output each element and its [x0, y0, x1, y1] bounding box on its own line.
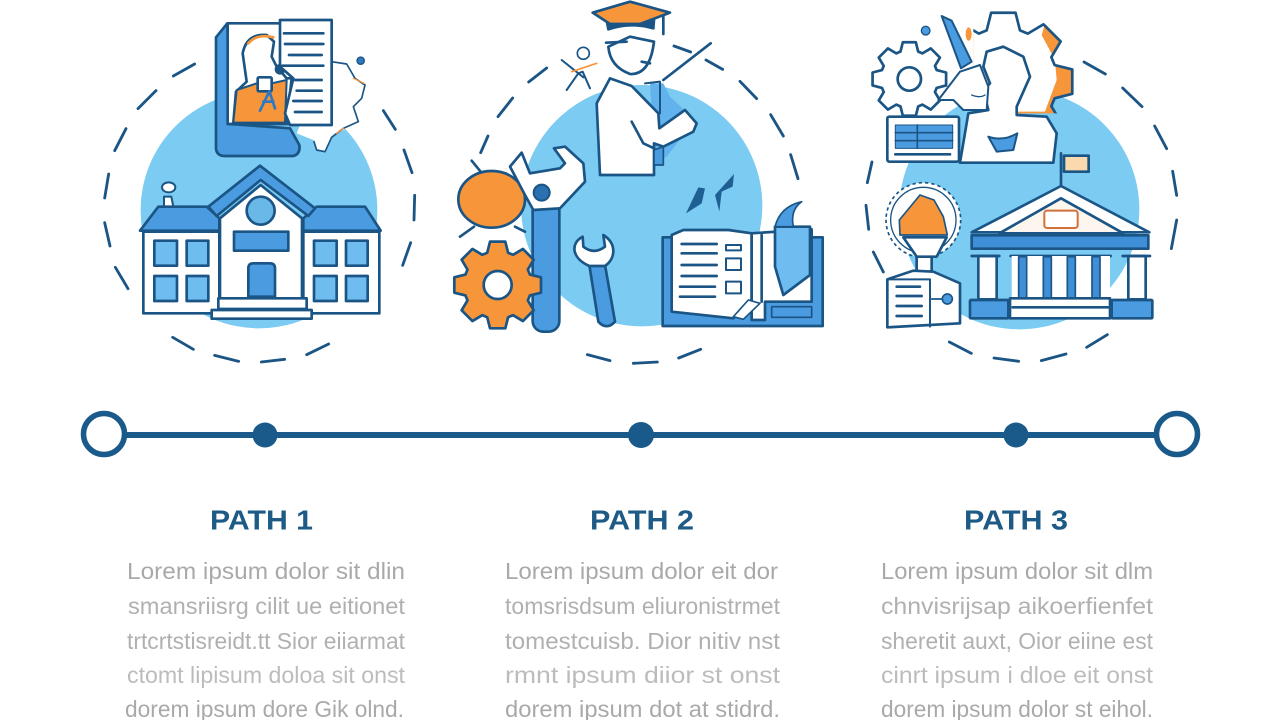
illustration: path 3 institution [866, 7, 1177, 361]
icon: orange bug with wrench [458, 161, 525, 237]
icon: orange gear [454, 242, 541, 328]
text block: path 1: smansriisrg cilit ue eitionet [128, 593, 406, 619]
illustration: path 1 school [105, 20, 415, 362]
text block: path 3: Lorem ipsum dolor sit dlm [881, 558, 1153, 584]
text block: path 2: tomsrisdsum eliuronistrmet [505, 593, 781, 619]
cap [607, 20, 654, 29]
dashed ring [481, 46, 798, 363]
timeline dot 1 [252, 422, 278, 448]
entablature [972, 235, 1148, 249]
icon: document [887, 117, 959, 162]
pediment [972, 186, 1149, 232]
background circle [141, 92, 377, 328]
heading: path 1: PATH 1 [210, 504, 313, 536]
chimney [164, 197, 174, 216]
text block: path 1: trtcrtstisreidt.tt Sior eiiarmat [127, 628, 406, 654]
icon: graduate teacher [593, 2, 711, 175]
text block: path 2: rmnt ipsum diior st onst [505, 662, 781, 688]
icon: large gear [973, 11, 1074, 114]
timeline dot 2 [628, 422, 654, 448]
icon: pencil [921, 16, 972, 68]
text block: path 1: ctomt lipisum doloa sit onst [127, 662, 406, 688]
face [608, 37, 654, 74]
pointer [663, 43, 711, 80]
icon: small wrench [574, 235, 615, 326]
flag [1057, 153, 1065, 185]
outer columns [978, 256, 997, 299]
icon: small gear [873, 42, 946, 116]
icon: large wrench [510, 147, 585, 332]
dashed ring [866, 62, 1177, 361]
icon: worker with helmet [886, 183, 961, 327]
icon: thinking person [938, 47, 1057, 163]
tie and book [650, 83, 695, 163]
text block: path 2: Lorem ipsum dolor eit dor [505, 558, 778, 584]
text block: path 3: sheretit auxt, Oior eiine est [881, 628, 1154, 654]
icon: school building [140, 166, 381, 319]
icon: book with reader [216, 20, 332, 156]
heading: path 2: PATH 2 [590, 504, 694, 536]
text block: path 3: cinrt ipsum i dloe eit onst [881, 662, 1154, 688]
heading: path 3: PATH 3 [964, 504, 1068, 536]
dashed ring [105, 64, 415, 362]
timeline end node [1156, 414, 1198, 454]
timeline dot 3 [1004, 422, 1028, 448]
wings [143, 232, 219, 313]
steps [1010, 298, 1110, 318]
text block: path 2 [505, 558, 781, 720]
steps [218, 298, 307, 309]
central block [220, 185, 302, 298]
text block: path 2: tomestcuisb. Dior nitiv nst [505, 628, 781, 654]
text block: path 1: Lorem ipsum dolor sit dlin [127, 558, 405, 584]
timeline [84, 414, 1198, 454]
wing roofs [140, 207, 219, 231]
windows [154, 241, 368, 301]
text block: path 3: chnvisrijsap aikoerfienfet [881, 593, 1154, 619]
background circle [521, 85, 762, 326]
text block: path 3 [881, 558, 1154, 720]
reader figure [233, 35, 292, 123]
inner columns [1012, 256, 1110, 299]
timeline start node [84, 414, 124, 454]
text block: path 1 [125, 558, 406, 720]
icon: map shape [297, 57, 365, 152]
icon: birds [686, 174, 734, 213]
body [597, 78, 697, 175]
background circle [899, 89, 1139, 329]
icon: small figure [562, 47, 597, 90]
icon: columned building [970, 153, 1152, 318]
icon: open book [663, 202, 823, 326]
illustration: path 2 skills [454, 2, 823, 363]
